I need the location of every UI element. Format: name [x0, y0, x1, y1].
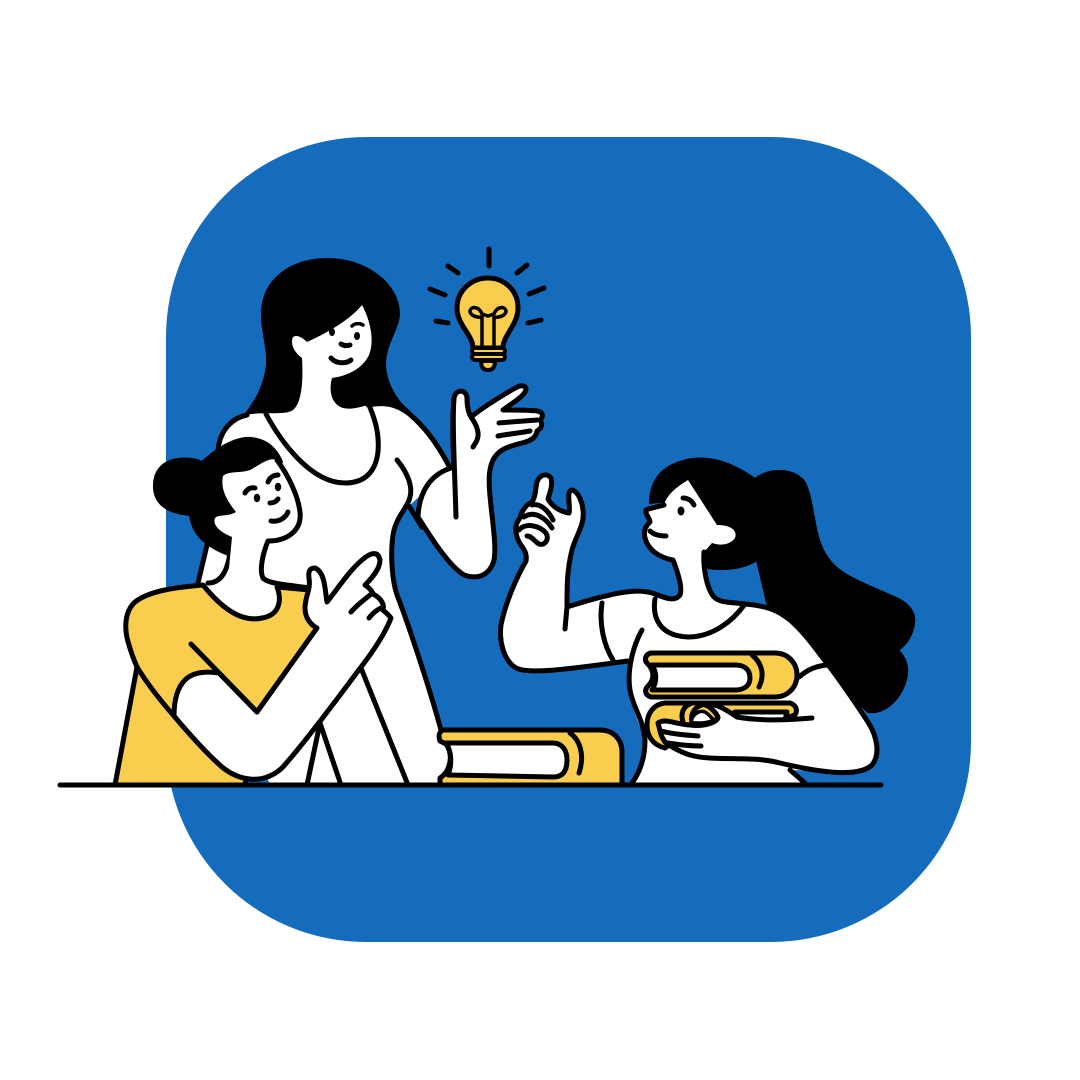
top book cover	[645, 653, 797, 697]
standing woman right shoulder	[368, 404, 451, 470]
right woman torso line	[629, 630, 645, 783]
right woman curled fingers	[519, 505, 553, 544]
standing woman elbow line	[409, 506, 422, 527]
light bulb idea icon	[430, 249, 544, 370]
left book spine curve	[570, 733, 582, 773]
right woman neckline	[654, 599, 745, 637]
seated woman face outline	[261, 460, 310, 588]
standing woman finger lines	[498, 420, 537, 436]
right woman raised arm and hand outline	[501, 475, 628, 671]
seated woman face and neck fill	[214, 459, 310, 625]
right woman body and raised arm fill	[501, 475, 877, 783]
right woman hair	[650, 458, 914, 712]
right woman lower forearm outline	[665, 666, 877, 773]
right woman sleeve edge	[799, 665, 830, 677]
bulb rays	[430, 249, 544, 323]
right woman lower arm and hand fill	[658, 666, 877, 773]
seated woman brows	[245, 475, 278, 493]
seated woman forearm and hand	[174, 554, 391, 779]
seated woman back neck curve	[208, 540, 231, 583]
standing woman left shoulder	[218, 415, 247, 450]
right woman neck and shoulder outline	[704, 552, 829, 666]
standing woman brow	[352, 324, 363, 326]
standing woman forearm line	[453, 398, 456, 517]
standing woman neckline	[266, 405, 378, 483]
right woman smile	[650, 531, 666, 536]
bulb base	[472, 348, 505, 354]
standing woman legs	[307, 668, 408, 785]
standing woman nose	[341, 344, 350, 346]
right woman brow	[683, 498, 694, 505]
top book pages	[652, 665, 750, 690]
standing woman face	[329, 324, 363, 363]
seated woman sleeve fold	[191, 644, 257, 712]
seated woman nose	[270, 499, 278, 503]
lower book pages	[735, 712, 787, 720]
bulb filament	[470, 308, 506, 346]
seated woman sleeve outline	[137, 667, 174, 716]
seated woman yellow shirt	[115, 585, 317, 785]
seated woman finger lines	[351, 595, 381, 618]
seated woman hair and bun	[154, 438, 282, 556]
right woman hand finger lines	[661, 731, 701, 746]
lower book spine curves	[682, 704, 702, 722]
standing woman raised arm and hand	[418, 386, 542, 577]
lower book cover	[647, 703, 796, 748]
right woman eye	[678, 506, 684, 516]
left book cover	[439, 730, 622, 785]
right woman thumb gap	[691, 711, 714, 723]
table line	[60, 782, 881, 788]
seated woman smile	[271, 512, 288, 521]
seated woman eyes	[254, 494, 260, 502]
standing woman thumb crease	[471, 417, 478, 447]
book on the table	[439, 730, 622, 785]
left book pages	[446, 743, 567, 777]
top book spine curve	[752, 655, 762, 687]
standing woman body fill	[198, 305, 455, 785]
standing woman back behind seated woman	[198, 545, 207, 583]
seated woman on the right	[501, 458, 914, 783]
standing woman smile	[331, 358, 351, 363]
right woman hand and upper forearm outline	[658, 704, 812, 742]
standing woman hair	[245, 259, 410, 420]
blue rounded square background	[166, 137, 971, 942]
bulb cap	[481, 361, 495, 370]
standing woman eyes	[329, 328, 335, 336]
right woman sleeve	[601, 603, 613, 660]
standing woman	[198, 259, 542, 785]
seated woman on the left	[115, 438, 391, 785]
right woman face outline	[567, 505, 681, 607]
standing woman side outline	[392, 460, 441, 730]
bulb glass	[457, 278, 518, 348]
right woman lower waist line	[790, 770, 805, 783]
